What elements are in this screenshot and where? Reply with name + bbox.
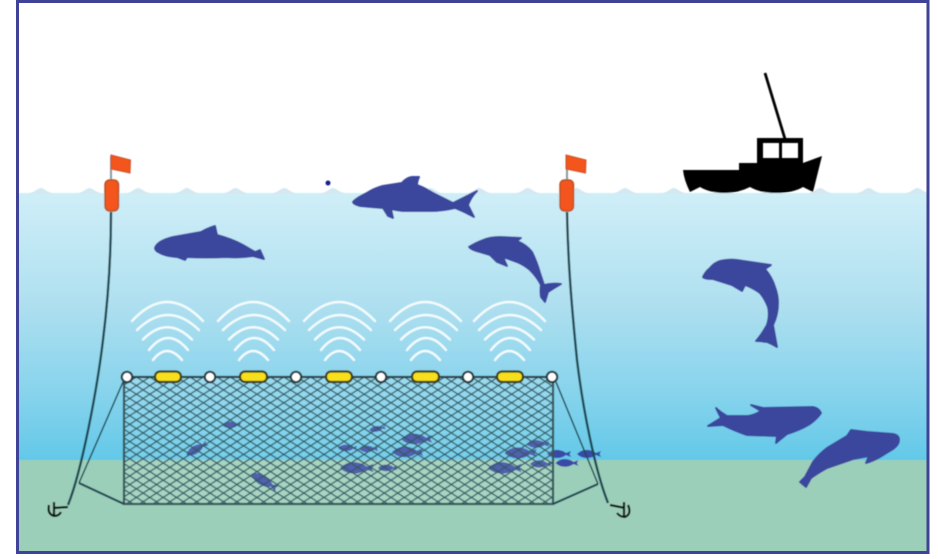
net mesh bbox=[124, 378, 553, 504]
hull bbox=[683, 156, 822, 193]
pilot whale lower right bbox=[800, 430, 899, 487]
left mooring lines bbox=[68, 212, 124, 505]
seafloor bbox=[18, 460, 928, 552]
surface waves bbox=[18, 185, 928, 194]
pinger arcs 2 bbox=[218, 302, 289, 360]
water body bbox=[18, 193, 928, 461]
pinger arcs 5 bbox=[474, 302, 545, 360]
small fish school bbox=[184, 422, 601, 493]
dolphin at surface bbox=[353, 177, 477, 218]
net floats bbox=[122, 372, 557, 382]
fishing boat bbox=[683, 73, 822, 193]
yellow pingers bbox=[155, 372, 523, 382]
net tint bbox=[124, 378, 553, 504]
pinger arcs 4 bbox=[390, 302, 461, 360]
left marker buoy and flag bbox=[105, 155, 130, 211]
cabin bbox=[757, 138, 803, 165]
blue dot bbox=[326, 180, 330, 186]
right marker buoy and flag bbox=[560, 155, 586, 211]
net headline bbox=[127, 376, 552, 378]
right anchor bbox=[610, 502, 629, 517]
pilot whale mid right bbox=[708, 405, 821, 443]
diving dolphin right bbox=[703, 260, 778, 347]
pinger arcs 3 bbox=[304, 302, 375, 360]
cetaceans bbox=[155, 177, 899, 487]
pinger arcs 1 bbox=[132, 302, 203, 360]
white floats bbox=[122, 372, 557, 382]
left anchor bbox=[49, 502, 68, 516]
net frame bbox=[124, 378, 553, 504]
gill net bbox=[124, 377, 553, 504]
right mooring lines bbox=[553, 212, 608, 504]
mast bbox=[765, 73, 785, 139]
porpoise left bbox=[155, 226, 264, 260]
leaping dolphin near buoy bbox=[469, 237, 561, 302]
fish bbox=[184, 439, 209, 458]
sonar pinger waves bbox=[132, 302, 545, 360]
